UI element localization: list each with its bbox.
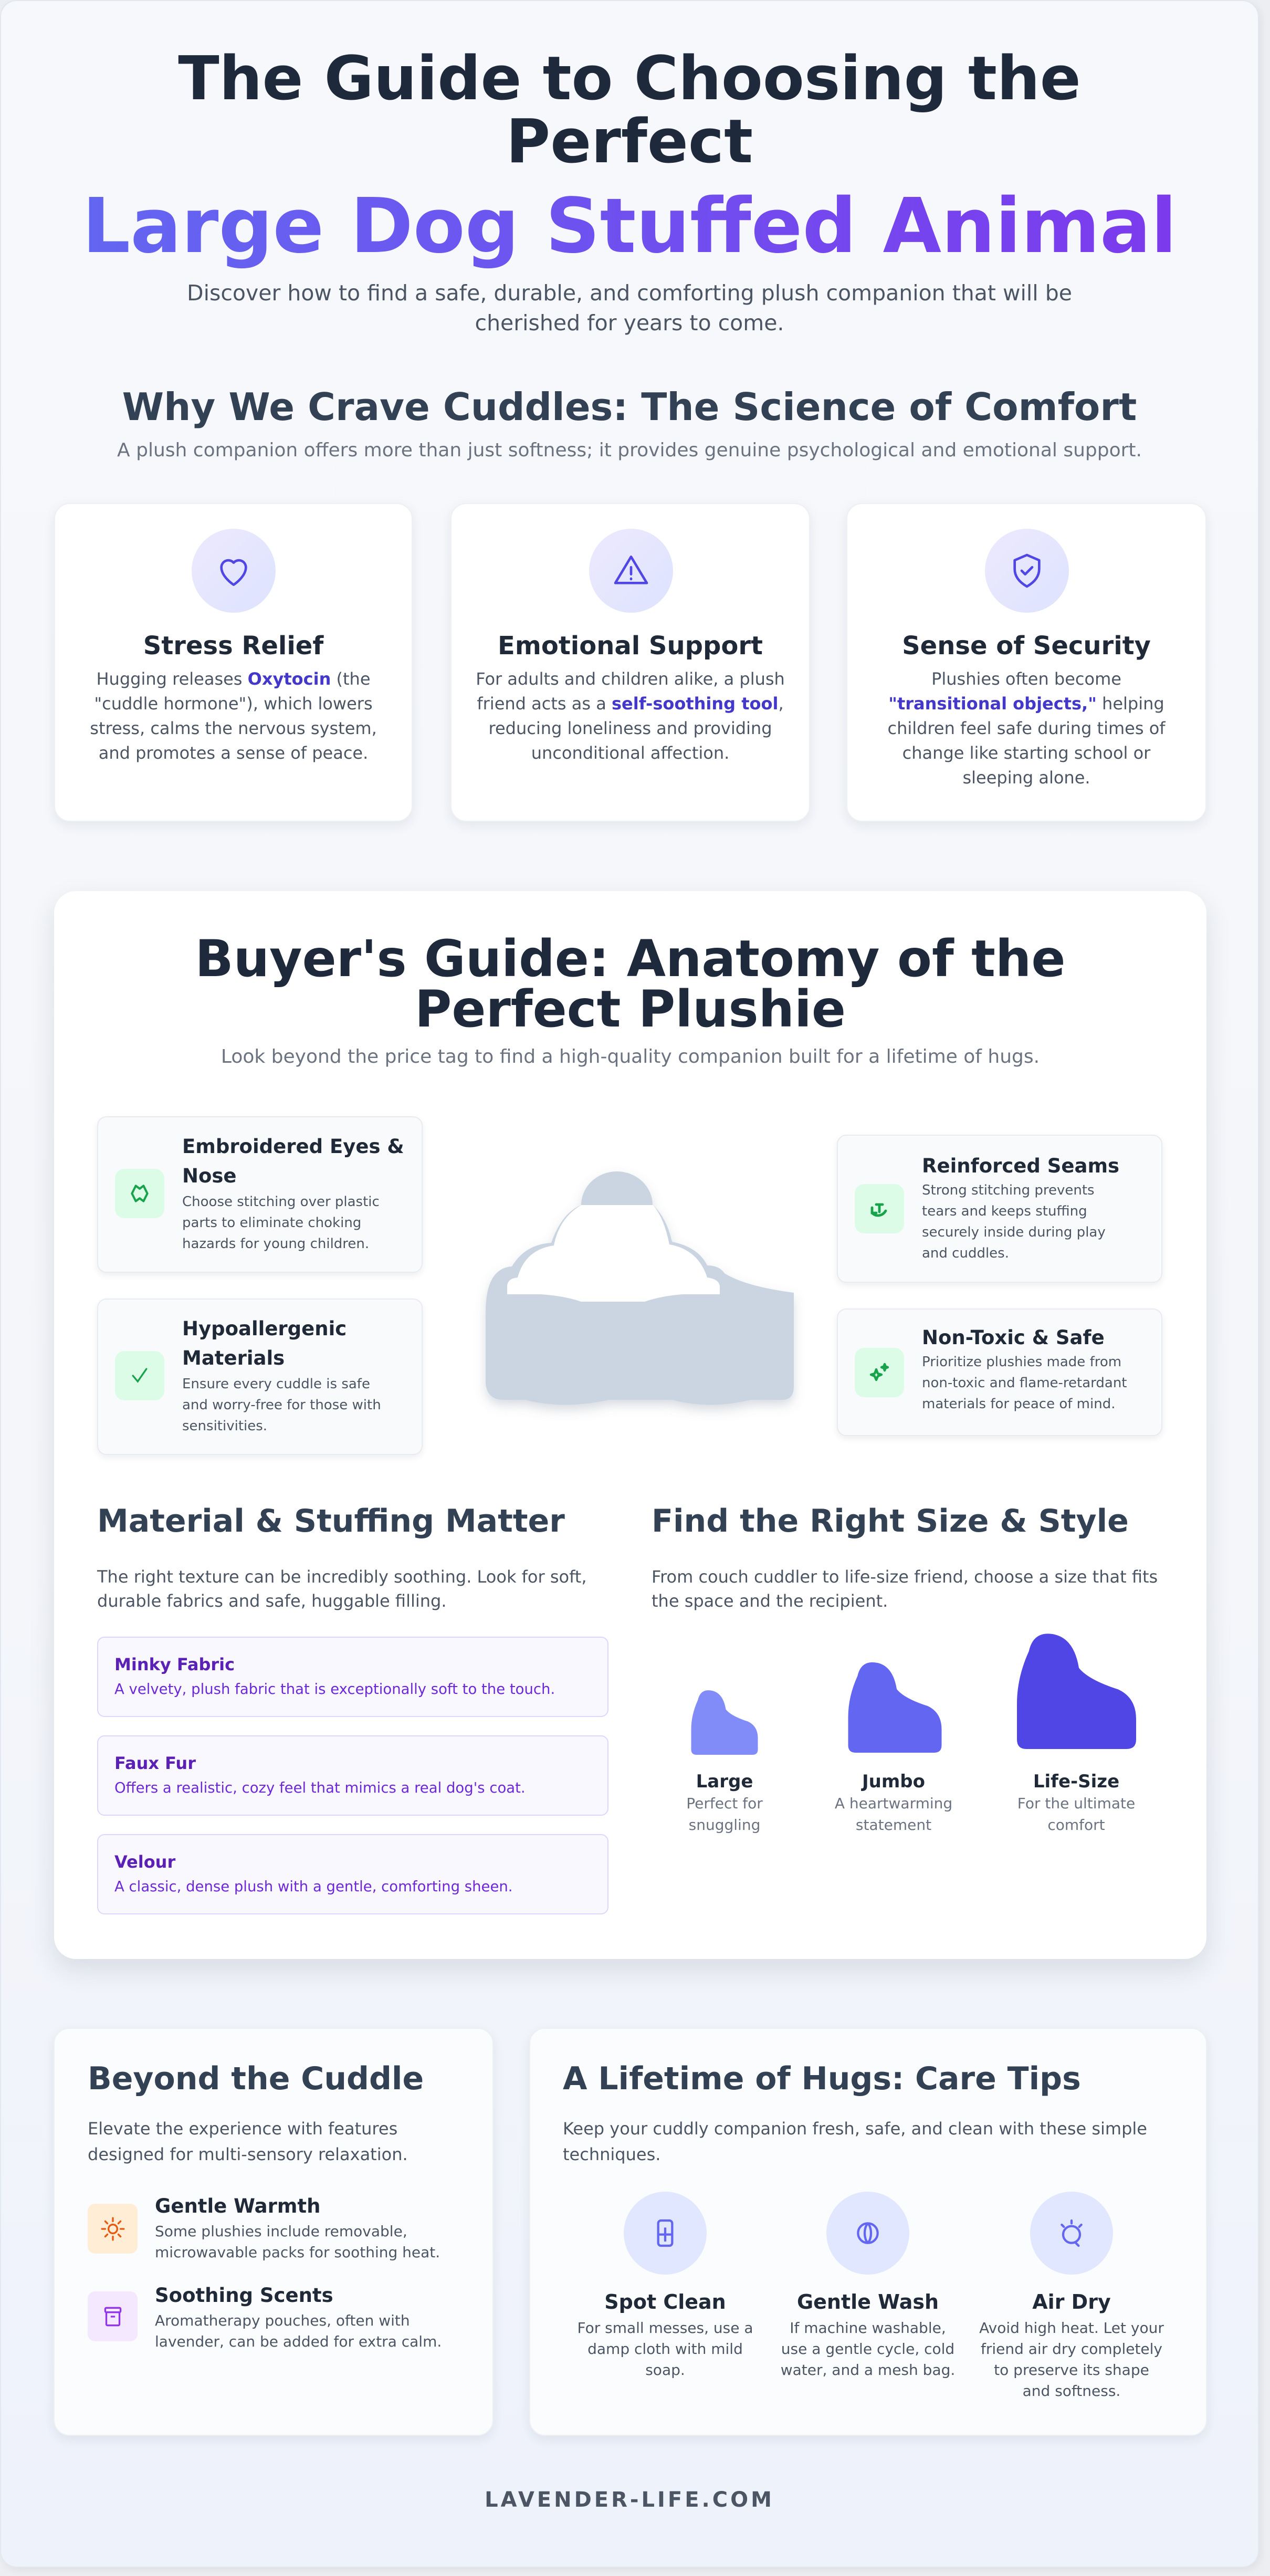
text: parts to eliminate choking [182, 1215, 361, 1231]
label: jumbo: Jumbo [862, 1771, 925, 1792]
item: gentle warmth [88, 2202, 476, 2265]
heading: size & style: Find the Right Size & Style [652, 1503, 1129, 1540]
label: jumbo [835, 1771, 952, 1834]
tip: air dry: to preserve its shape [994, 2361, 1149, 2379]
text: Ensure every cuddle is safe [182, 1376, 370, 1392]
text [922, 1354, 1127, 1412]
card text [887, 669, 1166, 788]
card text: and promotes a sense of peace. [99, 743, 368, 763]
card: sense of security [846, 503, 1206, 822]
card: emotional support [450, 503, 810, 822]
text: Keep your cuddly companion fresh, safe, and clean with these simple [563, 2119, 1147, 2139]
card title: Emotional Support [498, 631, 763, 661]
card text: change like starting school or [902, 743, 1150, 763]
tip: air dry: Avoid high heat. Let your [979, 2319, 1164, 2337]
card text [476, 669, 785, 763]
title: Materials [182, 1347, 285, 1369]
feature: non-toxic [837, 1308, 1162, 1436]
heading: why we crave cuddles: Why We Crave Cuddles: The Science of Comfort [122, 385, 1137, 429]
title: Non-Toxic & Safe [922, 1326, 1105, 1349]
material: faux fur: Offers a realistic, cozy feel that mimics a real dog's coat. [114, 1779, 526, 1796]
text [922, 1182, 1106, 1261]
tip: gentle wash: Gentle Wash [797, 2290, 939, 2313]
text: size intro: From couch cuddler to life-size friend, choose a size that fits [652, 1567, 1158, 1587]
label: jumbo: A heartwarming [835, 1795, 952, 1812]
tip: gentle wash: If machine washable, [790, 2319, 946, 2337]
label: large [686, 1771, 763, 1834]
label: life-size: comfort [1047, 1816, 1105, 1834]
card text: children feel safe during times of [887, 718, 1166, 738]
title [178, 44, 1081, 177]
tip: air dry: Air Dry [1032, 2290, 1111, 2313]
text: materials for peace of mind. [922, 1396, 1115, 1412]
text [182, 1194, 380, 1252]
label: life-size: Life-Size [1033, 1771, 1119, 1792]
subheading: Look beyond the price tag to find a high-quality companion built for a lifetime of hugs. [221, 1046, 1040, 1067]
label: jumbo: statement [856, 1816, 931, 1834]
label: life-size: For the ultimate [1017, 1795, 1135, 1812]
heading: buyer's guide [195, 929, 1065, 1039]
material: minky [97, 1637, 608, 1717]
label: life-size [1017, 1771, 1135, 1834]
feature: embroidered eyes [97, 1116, 423, 1273]
text: material intro: durable fabrics and safe, huggable filling. [97, 1591, 446, 1611]
text: and cuddles. [922, 1245, 1009, 1261]
text: size intro: the space and the recipient. [652, 1591, 888, 1611]
text: hazards for young children. [182, 1236, 369, 1252]
item: gentle warmth: microwavable packs for soothing heat. [155, 2244, 440, 2261]
icon: sun [88, 2204, 138, 2254]
card text: unconditional affection. [531, 743, 729, 763]
text: size intro [652, 1567, 1158, 1611]
text: non-toxic and flame-retardant [922, 1375, 1127, 1391]
text: Elevate the experience with features [88, 2119, 397, 2139]
item: gentle warmth: Some plushies include removable, [155, 2223, 407, 2240]
text: securely inside during play [922, 1224, 1106, 1240]
panel: care tips [529, 2028, 1207, 2436]
text: designed for multi-sensory relaxation. [88, 2144, 408, 2164]
tip: air dry: and softness. [1023, 2382, 1120, 2400]
card text: For adults and children alike, a plush [476, 669, 785, 689]
icon [855, 1184, 904, 1233]
title: Embroidered Eyes & [182, 1135, 404, 1158]
tip: spot clean: soap. [645, 2361, 685, 2379]
item: soothing scents: Soothing Scents [155, 2284, 333, 2307]
tip: air dry [974, 2192, 1169, 2433]
text: material intro [97, 1567, 587, 1611]
title [182, 1317, 347, 1369]
illustration: plush dog silhouette [482, 1171, 798, 1414]
icon: jar [88, 2291, 138, 2341]
icon [115, 1351, 164, 1400]
item: soothing scents [88, 2290, 476, 2353]
text [88, 2119, 408, 2164]
size: life-size blob [1017, 1633, 1136, 1749]
heading: buyer's guide: Perfect Plushie [415, 980, 846, 1039]
text: and worry-free for those with [182, 1397, 381, 1413]
card text: reducing loneliness and providing [488, 718, 772, 738]
icon: heart [192, 529, 276, 613]
tip: gentle wash: use a gentle cycle, cold [781, 2340, 954, 2358]
size: jumbo blob [848, 1662, 942, 1753]
material: velour [97, 1834, 608, 1914]
heading: material & stuffing: Material & Stuffing Matter [97, 1503, 565, 1540]
icon: shield [985, 529, 1069, 613]
title: Nose [182, 1165, 237, 1187]
card text: "cuddle hormone"), which lowers [94, 694, 373, 714]
tip: spot clean: Spot Clean [604, 2290, 726, 2313]
title: Reinforced Seams [922, 1155, 1119, 1177]
material: faux fur [97, 1735, 608, 1816]
title: Perfect [506, 107, 753, 177]
text: Strong stitching prevents [922, 1182, 1095, 1198]
label: large: Perfect for [686, 1795, 763, 1812]
item: soothing scents: Aromatherapy pouches, often with [155, 2312, 410, 2329]
text: Prioritize plushies made from [922, 1354, 1121, 1370]
material: faux fur: Faux Fur [114, 1753, 196, 1773]
tip: gentle wash [771, 2192, 965, 2412]
title: Hypoallergenic [182, 1317, 347, 1340]
panel: beyond the cuddle [54, 2028, 494, 2436]
text: Choose stitching over plastic [182, 1194, 380, 1210]
card text: stress, calms the nervous system, [90, 718, 377, 738]
text: tears and keeps stuffing [922, 1203, 1087, 1219]
text: sensitivities. [182, 1418, 267, 1434]
material: minky: Minky Fabric [114, 1654, 235, 1674]
tip: spot clean [568, 2192, 762, 2412]
feature: reinforced seams [837, 1135, 1162, 1283]
card text: friend acts as a self-soothing tool, [477, 694, 784, 714]
material: velour: A classic, dense plush with a gentle, comforting sheen. [114, 1878, 513, 1895]
text: techniques. [563, 2144, 660, 2164]
card: stress relief [54, 503, 413, 822]
tip: spot clean: For small messes, use a [577, 2319, 753, 2337]
icon [855, 1348, 904, 1397]
tip: spot clean: damp cloth with mild [587, 2340, 743, 2358]
material: minky: A velvety, plush fabric that is exceptionally soft to the touch. [114, 1681, 555, 1698]
title highlight: Large Dog Stuffed Animal [82, 182, 1177, 270]
card title: Sense of Security [902, 631, 1151, 661]
icon: warning [589, 529, 673, 613]
label: large: Large [696, 1771, 753, 1792]
title [182, 1135, 404, 1187]
subheading: A plush companion offers more than just softness; it provides genuine psychological and emotional support. [117, 439, 1142, 461]
tip: gentle wash: water, and a mesh bag. [781, 2361, 955, 2379]
heading: buyer's guide: Buyer's Guide: Anatomy of the [195, 929, 1065, 988]
icon [115, 1169, 164, 1218]
subtitle: cherished for years to come. [475, 310, 784, 336]
card text [90, 669, 377, 763]
item: soothing scents: lavender, can be added for extra calm. [155, 2333, 442, 2350]
feature: hypoallergenic [97, 1299, 423, 1455]
text [563, 2116, 1147, 2167]
heading: Beyond the Cuddle [88, 2060, 424, 2097]
card text: Hugging releases Oxytocin (the [96, 669, 371, 689]
card text: "transitional objects," helping [888, 694, 1164, 714]
text: material intro: The right texture can be incredibly soothing. Look for soft, [97, 1567, 587, 1587]
footer: LAVENDER-LIFE.COM [485, 2488, 774, 2512]
card text: sleeping alone. [962, 768, 1090, 788]
card text: Plushies often become [931, 669, 1121, 689]
heading: A Lifetime of Hugs: Care Tips [563, 2060, 1081, 2097]
panel: buyer's guide [54, 891, 1206, 1959]
title: The Guide to Choosing the [178, 44, 1081, 114]
text [182, 1376, 381, 1434]
label: large: snuggling [689, 1816, 760, 1834]
subtitle [187, 280, 1072, 336]
item: gentle warmth: Gentle Warmth [155, 2195, 320, 2217]
size: large blob [691, 1690, 758, 1755]
tip: air dry: friend air dry completely [981, 2340, 1162, 2358]
material: velour: Velour [114, 1852, 175, 1872]
card title: Stress Relief [143, 631, 323, 661]
subtitle: Discover how to find a safe, durable, and comforting plush companion that will be [187, 280, 1072, 306]
